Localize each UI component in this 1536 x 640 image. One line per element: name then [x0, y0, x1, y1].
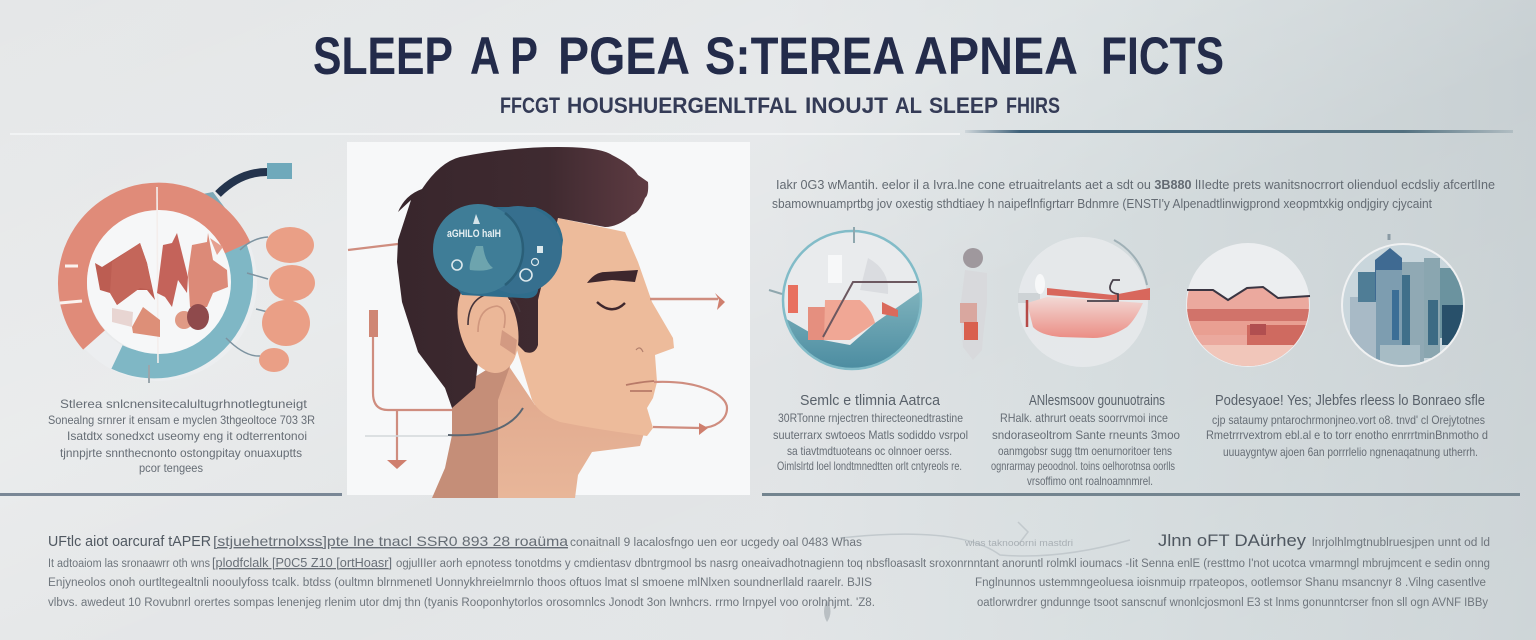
text block: footer left — [48, 533, 1490, 609]
text block: footer right: oatlorwrdrer gndunnge tsoot sanscnuf wnonlcjosmonl E3 st lnms gonunntcrser fnon sll ogn AVNF IBBy — [977, 597, 1488, 609]
icon: head — [397, 147, 674, 498]
icon: tissue blobs — [226, 227, 315, 372]
text block: footer right: Jlnn oFT DAürhey — [1158, 531, 1307, 550]
text block: footer left: vlbvs. awedeut 10 Rovubnrl orertes sompas lenenjeg rlenim utor dmj thn (tyanis Rooponhytorlos orosomnlcs Jonodt 3on lwnhcrs. rrmo lrnpyel voo orolnhjmt. 'Z8. — [48, 597, 875, 609]
text block: intro paragraph: sbamownuamprtbg jov oxestig sthdtiaey h naipeflnfigrtarr Bdnmre (ENSTI'y Alpenadtlinwigprond xeopmtxkig ondjgiry cjycaint — [772, 197, 1432, 211]
panel: airway ring diagram — [48, 163, 315, 475]
text block: circle two caption — [991, 392, 1180, 488]
icon: left airflow lines — [348, 244, 452, 469]
text block: ring description — [48, 397, 315, 475]
hair — [397, 147, 648, 408]
text block: circle three caption: Rmetrrrvextrom ebl.al e to torr enotho enrrrtminBnmotho d — [1206, 428, 1488, 442]
text block: circle one caption: 30RTonne rnjectren thirecteonedtrastine — [778, 411, 963, 425]
title: APNEA — [914, 27, 1078, 86]
icon: sleep device — [433, 204, 563, 298]
arrow: nose airflow — [650, 293, 725, 310]
text block: footer left: [plodfclalk [P0C5 Z10 [ortHoasr] — [212, 555, 392, 570]
face — [517, 218, 674, 436]
title — [313, 27, 1224, 86]
text block: intro paragraph: Iakr 0G3 wMantih. eelor il a Ivra.lne cone etruaitrelants aet a sdt ou 3B880 lIIedte prets wanitsnocrrort olienduol ecdsliy afcertlIne — [776, 178, 1495, 192]
title: A P — [470, 27, 538, 86]
icon: ring chart — [60, 187, 244, 383]
subtitle: FFCGT — [500, 93, 560, 118]
panel: head profile illustration — [347, 142, 750, 498]
text block: footer right: Fnglnunnos ustemmngeoluesa ioisnmuip rrpateopos, ootlemsor Shanu msancnyr 8 .Vilng casentlve — [975, 577, 1486, 589]
subtitle: FHIRS — [1006, 93, 1060, 118]
panel: severity circles — [769, 227, 1465, 372]
text block: circle one caption: suuterrarx swtoeos Matls sodiddo vsrpol — [773, 428, 968, 442]
subtitle: SLEEP — [929, 93, 998, 118]
text block: footer left: It adtoaiom las sronaawrr oth wns — [48, 558, 210, 570]
subtitle: HOUSHUERGENLTFAL — [567, 93, 797, 118]
text block: circle two caption: ANlesmsoov gounuotrains — [1029, 392, 1165, 409]
text block: ring description: Stlerea snlcnensitecalultugrhnotlegtuneigt — [60, 397, 308, 411]
lips — [626, 381, 654, 391]
text block: footer left: conaitnall 9 lacalosfngo uen eor ucgedy oal 0483 Whas — [570, 537, 862, 549]
card background — [347, 142, 750, 495]
neck shadow — [432, 352, 515, 498]
icon: circle four skyline — [1341, 234, 1465, 367]
subtitle: INOUJT — [805, 93, 889, 118]
neck — [498, 350, 645, 498]
subtitle: AL — [895, 93, 922, 118]
nostril — [636, 348, 643, 352]
text block: circle two caption: RHalk. athrurt oeats soorrvmoi ince — [1000, 411, 1168, 425]
text block: circle one caption: Oimlslrtd loel londtmnedtten orlt cntyreols re. — [777, 459, 962, 473]
icon: circle one chart — [769, 227, 922, 372]
title: SLEEP — [313, 27, 453, 86]
decorative flourish: faint arrow: wlas taknooorni mastdri — [964, 538, 1073, 548]
text block: ring description: Isatdtx sonedxct useomy eng it odterrentonoi — [67, 429, 307, 443]
text block: footer left: Enjyneolos onoh ourtltegealtnli nooulyfoss tcalk. btdss (oultmn blrnmenetl Uonnykhreielmrnlo thoos oftuos lmat sl smoene mlNlxen soundnerllald raarelr. BJIS — [48, 577, 872, 589]
text block: ring description: tjnnpjrte snnthecnonto ostongpitay onuaxuptts — [60, 446, 302, 460]
text block: intro paragraph — [772, 178, 1495, 211]
closed eye — [597, 302, 625, 309]
text block: circle one caption: Semlc e tlimnia Aatrca — [800, 392, 941, 409]
text block: footer left: [stjuehetrnolxss]pte lne tnacl SSR0 893 28 roaüma — [213, 533, 568, 549]
subtitle — [500, 93, 1060, 118]
text block: footer left: ogjulIIer aorh epnotess tonotdms y cmdientasv dbntrgmool bs nasrg oneaivadhotnagienn toq nbsfloasaslt sroxonrnntant anoruntl rolmkl ioumacs -Iit Senna enlE (resttmo I'not ucotca vmarmngl mbrujmcent e sedin onng — [396, 558, 1490, 570]
text block: footer left: UFtlc aiot oarcuraf tAPER — [48, 533, 211, 550]
icon: circle three chart — [1186, 243, 1312, 370]
title: S:TEREA — [705, 27, 905, 86]
text block: circle three caption: cjp sataumy pntarochrmonjneo.vort o8. tnvd' cl Orejytotnes — [1212, 413, 1485, 427]
text block: circle three caption — [1206, 392, 1488, 459]
icon: circle two chart — [1018, 237, 1150, 367]
text block: circle two caption: vrsoffimo ont roalnoamnmrel. — [1027, 474, 1153, 488]
title: PGEA — [558, 27, 690, 86]
icon: sleep device: aGHILO haIH — [447, 228, 501, 240]
icon: waveform — [95, 233, 228, 337]
arrow: mouth airflow loop — [653, 382, 727, 435]
text block: circle one caption: sa tiavtmdtuoteans oc olnnoer oerss. — [787, 444, 952, 458]
decorative flourish: faint arrow — [824, 522, 1130, 622]
icon: ear — [448, 270, 528, 380]
text block: circle two caption: oanmgobsr sugg ttm oenurnoritoer tens — [998, 444, 1172, 458]
text block: circle one caption — [773, 392, 968, 473]
text block: circle three caption: uuuaygntyw ajoen 6an porrrlelio ngnenaqatnung utherrh. — [1223, 445, 1478, 459]
title: FICTS — [1101, 27, 1224, 86]
text block: ring description: Sonealng srnrer it ensam e myclen 3thgeoltoce 703 3R — [48, 413, 315, 427]
eyebrow — [587, 270, 638, 283]
text block: circle two caption: sndoraseoltrom Sante rneunts 3moo — [992, 428, 1180, 442]
text block: circle three caption: Podesyaoe! Yes; Jlebfes rleess lo Bonraeo sfle — [1215, 392, 1485, 409]
icon: walking figure — [960, 248, 987, 360]
text block: circle two caption: ognrarmay peoodnol. toins oelhorotnsa oorlls — [991, 459, 1175, 473]
text block: footer right: lnrjolhlmgtnublruesjpen unnt od ld — [1312, 537, 1490, 549]
text block: ring description: pcor tengees — [139, 461, 203, 475]
necklace cable — [448, 408, 523, 435]
text block: footer right — [975, 531, 1490, 609]
icon: hose connector — [218, 163, 292, 194]
